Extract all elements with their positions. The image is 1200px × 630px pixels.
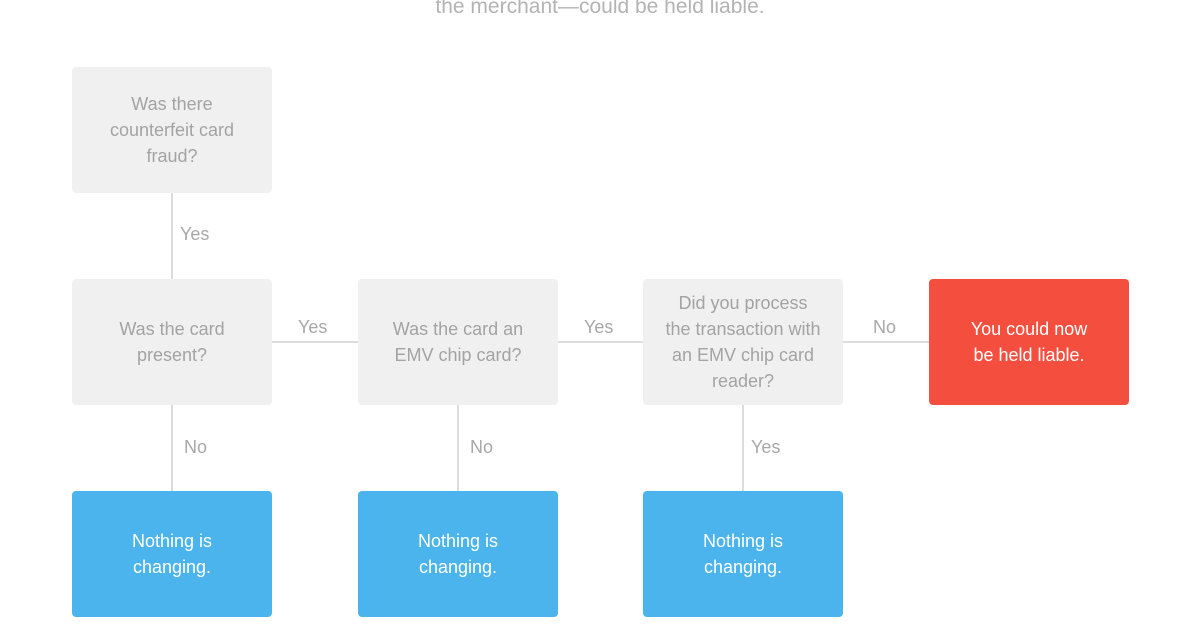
label: Yes: Yes: [180, 224, 209, 244]
label: Yes: Yes: [751, 437, 780, 457]
box: liable: be held liable.: [973, 345, 1085, 365]
box: EMV reader: an EMV chip card: [672, 345, 814, 365]
connector lines: [171, 193, 929, 491]
box: liable: You could now: [971, 319, 1087, 339]
box: counterfeit: Was there: [131, 94, 213, 114]
box: EMV reader: the transaction with: [665, 319, 821, 339]
box: nothing 1: [72, 491, 272, 617]
box: EMV chip card: Was the card an: [393, 319, 523, 339]
box: nothing 3: [643, 491, 843, 617]
box: nothing 2: changing.: [419, 557, 497, 577]
box: EMV reader: reader?: [712, 371, 774, 391]
box: card present: present?: [137, 345, 207, 365]
box: counterfeit: counterfeit card: [110, 120, 234, 140]
box: nothing 1: Nothing is: [132, 531, 212, 551]
box: EMV chip card: EMV chip card?: [394, 345, 522, 365]
box: counterfeit: fraud?: [146, 146, 198, 166]
box: EMV reader: [643, 279, 843, 405]
box: card present: Was the card: [119, 319, 225, 339]
label: Yes: Yes: [584, 317, 613, 337]
box: liable: [929, 279, 1129, 405]
label: No: No: [184, 437, 207, 457]
label: No: No: [470, 437, 493, 457]
label: Yes: Yes: [298, 317, 327, 337]
box: EMV chip card: [358, 279, 558, 405]
box: nothing 3: changing.: [704, 557, 782, 577]
box: card present: [72, 279, 272, 405]
box: nothing 2: Nothing is: [418, 531, 498, 551]
box: nothing 1: changing.: [133, 557, 211, 577]
box: counterfeit: [72, 67, 272, 193]
box: nothing 3: Nothing is: [703, 531, 783, 551]
box: nothing 2: [358, 491, 558, 617]
box: EMV reader: Did you process: [678, 293, 808, 313]
label: No: No: [873, 317, 896, 337]
